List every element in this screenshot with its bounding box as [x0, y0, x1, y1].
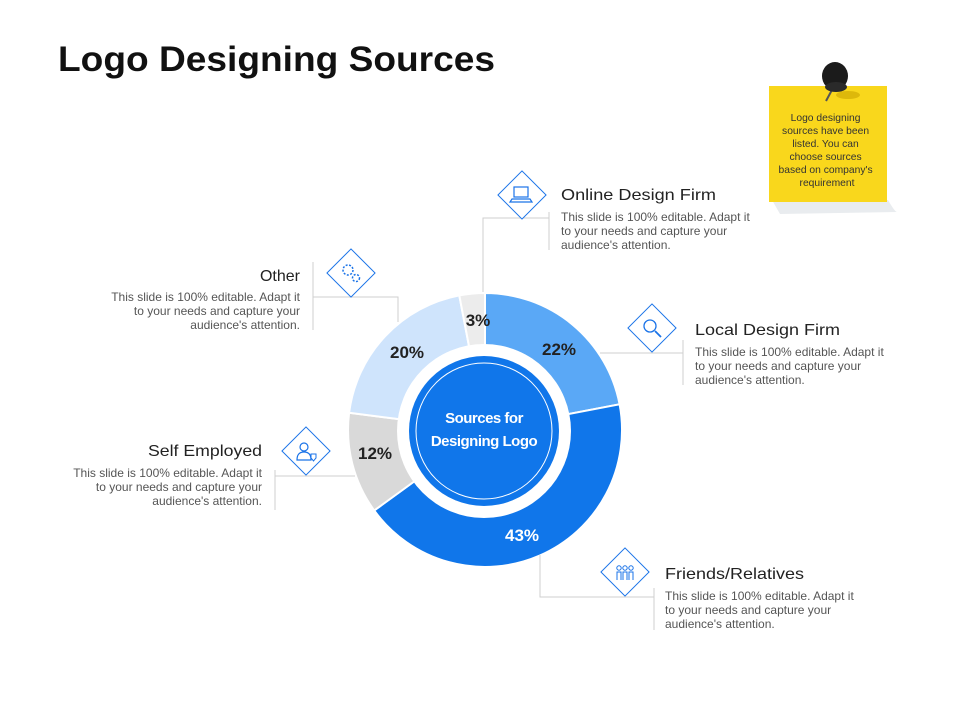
callout: Online Design Firm: to your needs and capture your: [561, 224, 727, 238]
sticky note: requirement: [800, 178, 855, 189]
sticky note: choose sources: [790, 152, 862, 163]
callout: Online Design Firm: Online Design Firm: [561, 187, 716, 204]
title: Logo Designing Sources: [58, 40, 495, 79]
sticky note: [769, 62, 897, 214]
callout: Friends/Relatives: to your needs and capture your: [665, 603, 831, 617]
callout: Local Design Firm: Local Design Firm: [695, 322, 840, 339]
donut chart: [348, 293, 622, 567]
icon: group of people: [601, 548, 649, 596]
callout: Friends/Relatives: audience's attention.: [665, 617, 775, 631]
icon: pushpin: [822, 62, 860, 101]
donut chart: 3%: [466, 311, 490, 330]
center label: [409, 356, 559, 506]
callout: Other: This slide is 100% editable. Adapt it: [111, 290, 301, 304]
icon: gears: [327, 249, 375, 297]
callout: Friends/Relatives: [601, 548, 854, 631]
connector lines: [275, 212, 683, 630]
center label: Sources for: [445, 410, 524, 427]
callout: Online Design Firm: [498, 171, 750, 252]
callout: Self Employed: This slide is 100% editable. Adapt it: [73, 466, 263, 480]
donut chart: 43%: [505, 526, 539, 545]
callout: Self Employed: Self Employed: [148, 443, 262, 460]
donut chart: 22%: [542, 340, 576, 359]
icon: laptop: [498, 171, 546, 219]
callout: Local Design Firm: to your needs and capture your: [695, 359, 861, 373]
icon: person: [282, 427, 330, 475]
sticky note: Logo designing: [791, 113, 861, 124]
callout: Online Design Firm: This slide is 100% editable. Adapt it: [561, 210, 750, 224]
icon: magnifier: [628, 304, 676, 352]
donut chart: 20%: [390, 343, 424, 362]
donut chart: 12%: [358, 444, 392, 463]
callout: Friends/Relatives: This slide is 100% editable. Adapt it: [665, 589, 854, 603]
callout: Online Design Firm: audience's attention.: [561, 238, 671, 252]
callout: Local Design Firm: This slide is 100% editable. Adapt it: [695, 345, 884, 359]
sticky note: sources have been: [782, 126, 869, 137]
callout: Other: Other: [260, 268, 301, 285]
callout: Other: [111, 249, 375, 332]
callout: Self Employed: [73, 427, 330, 508]
callout: Self Employed: audience's attention.: [152, 494, 262, 508]
center label: Designing Logo: [431, 433, 537, 450]
sticky note: based on company's: [778, 165, 873, 176]
callout: Other: audience's attention.: [190, 318, 300, 332]
callout: Other: to your needs and capture your: [134, 304, 300, 318]
callout: Friends/Relatives: Friends/Relatives: [665, 566, 804, 583]
sticky note: listed. You can: [792, 139, 859, 150]
callout: Self Employed: to your needs and capture your: [96, 480, 262, 494]
callout: Local Design Firm: audience's attention.: [695, 373, 805, 387]
callout: Local Design Firm: [628, 304, 884, 387]
